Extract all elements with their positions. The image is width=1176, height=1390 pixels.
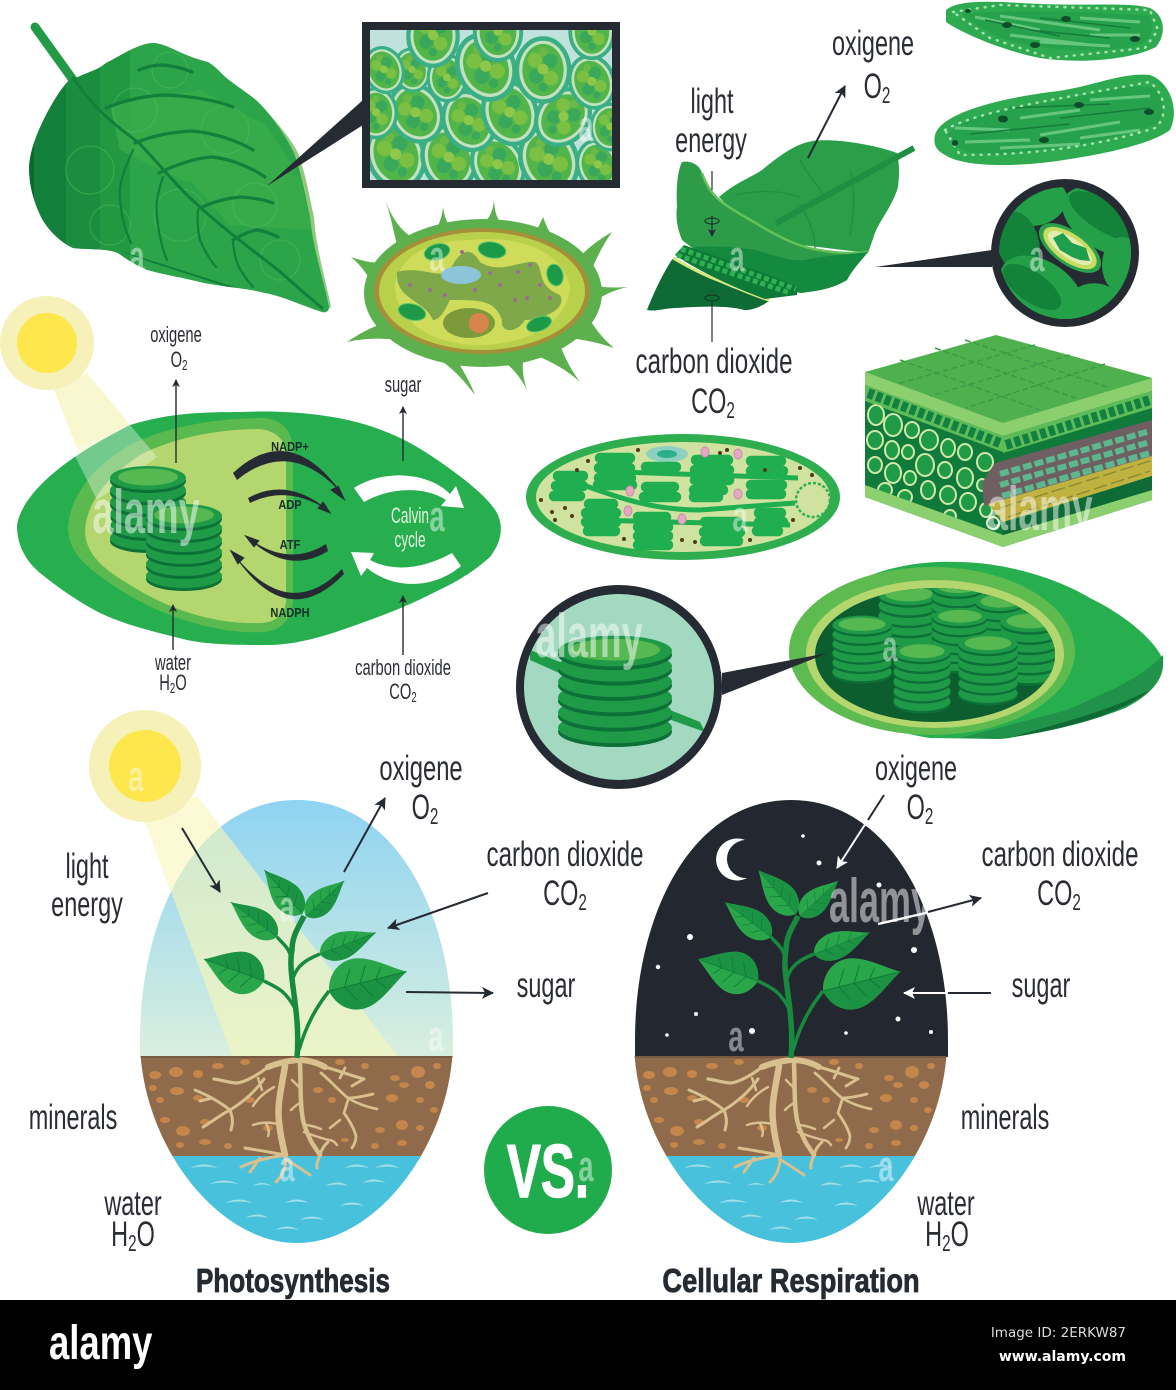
label: diagram carbon dioxide CO2 bbox=[355, 655, 451, 706]
soil, roots and water bbox=[624, 1056, 954, 1246]
footer logo: alamy bbox=[49, 1316, 153, 1370]
arrow: ATF bbox=[247, 537, 328, 561]
watermark: alamy marks: a bbox=[279, 881, 295, 931]
moon bbox=[716, 838, 747, 880]
watermark: alamy marks: a bbox=[129, 231, 145, 281]
watermark: alamy marks: a bbox=[732, 491, 748, 541]
thylakoid stack back bbox=[110, 466, 186, 553]
plant bbox=[197, 861, 413, 1058]
label: diagram water H2O bbox=[154, 650, 191, 697]
label: diagram water H2O: water bbox=[154, 650, 191, 675]
footer url: www.alamy.com bbox=[999, 1349, 1126, 1365]
label: day water H2O: 2 bbox=[128, 1231, 137, 1257]
thylakoid stack front bbox=[146, 504, 222, 591]
label: NADPH: NADPH bbox=[270, 605, 310, 620]
label: day water H2O: water bbox=[104, 1184, 162, 1223]
label: diagram oxigene O2 bbox=[150, 322, 202, 374]
label: night water H2O: H bbox=[925, 1215, 942, 1254]
label: Calvin cycle: cycle bbox=[394, 527, 426, 552]
arrow: oxygen out of leaf bbox=[808, 86, 845, 158]
watermark: alamy marks: a bbox=[728, 1011, 744, 1061]
label: light energy top: energy bbox=[675, 121, 747, 160]
label: day oxigene O2: oxigene bbox=[379, 750, 463, 788]
arrow: diagram sugar bbox=[402, 407, 404, 461]
arrow: ADP bbox=[248, 490, 329, 511]
arrow: day light energy bbox=[182, 828, 220, 892]
panel: photosynthesis day scene bbox=[130, 796, 460, 1246]
stars bbox=[656, 834, 933, 1037]
illustration: magnified cells circle bbox=[875, 179, 1139, 327]
label: day light energy: light bbox=[65, 847, 109, 886]
label: day water H2O bbox=[104, 1184, 162, 1257]
label: diagram water H2O: H bbox=[159, 670, 170, 695]
arrow: night oxygen bbox=[837, 795, 884, 868]
light beam overlay bbox=[72, 425, 157, 500]
label: night oxigene O2: O bbox=[907, 788, 925, 827]
soil, roots and water bbox=[130, 1056, 460, 1246]
label: day water H2O: O bbox=[137, 1215, 155, 1254]
label: day carbon dioxide CO2: CO bbox=[543, 874, 578, 913]
diagram: chloroplast light reactions and Calvin cycle bbox=[17, 412, 501, 645]
outer membrane band bbox=[68, 418, 293, 632]
label: diagram water H2O: 2 bbox=[170, 680, 175, 697]
label: oxigene O2 top: oxigene bbox=[832, 24, 914, 63]
watermark: alamy marks: a bbox=[882, 621, 898, 671]
label: night oxigene O2: 2 bbox=[925, 804, 933, 830]
label: day sugar: sugar bbox=[517, 966, 575, 1005]
illustration: micrograph with callout bbox=[267, 22, 620, 188]
label: night water H2O: water bbox=[917, 1184, 975, 1223]
label: day light energy bbox=[51, 847, 123, 924]
label: day oxigene O2 bbox=[379, 750, 463, 830]
arrow: diagram carbon dioxide bbox=[402, 596, 404, 655]
label: ADP: ADP bbox=[278, 497, 302, 512]
label: diagram oxigene O2: oxigene bbox=[150, 322, 202, 347]
footer image id: Image ID: 2ERKW87 bbox=[991, 1325, 1126, 1341]
label: night carbon dioxide CO2 bbox=[982, 836, 1138, 916]
label: diagram oxigene O2: 2 bbox=[182, 357, 188, 374]
footer bar bbox=[0, 1300, 1176, 1390]
label: night carbon dioxide CO2: CO bbox=[1037, 874, 1072, 913]
arrow: NADPH bbox=[232, 552, 344, 599]
label: oxigene O2 top: 2 bbox=[882, 83, 890, 109]
label: light energy top bbox=[675, 82, 747, 160]
arrow: diagram water bbox=[172, 605, 174, 650]
label: diagram oxigene O2: O bbox=[171, 347, 182, 372]
label: day oxigene O2: O bbox=[412, 788, 430, 827]
illustration: 3D chloroplast bbox=[789, 562, 1163, 739]
watermark: alamy marks: a bbox=[578, 1141, 594, 1191]
watermark: alamy marks: a bbox=[729, 231, 745, 281]
label: day carbon dioxide CO2 bbox=[487, 836, 643, 916]
watermark: alamy marks: alamy bbox=[829, 866, 931, 935]
label: day minerals: minerals bbox=[29, 1098, 117, 1137]
label: Calvin cycle: Calvin bbox=[391, 503, 429, 528]
illustration: leaf tissue block bbox=[865, 335, 1152, 547]
watermark: alamy marks: a bbox=[429, 231, 445, 281]
label: night carbon dioxide CO2: carbon dioxide bbox=[982, 836, 1138, 874]
night sky bbox=[635, 800, 948, 1057]
label: night water H2O: O bbox=[951, 1215, 969, 1254]
label: carbon dioxide CO2 top: CO bbox=[691, 382, 726, 421]
heading: Photosynthesis: Photosynthesis bbox=[196, 1263, 390, 1300]
watermark: alamy marks: a bbox=[428, 1011, 444, 1061]
illustration: chloroplast top bbox=[946, 2, 1163, 61]
arrowheads for cycle bbox=[232, 487, 343, 563]
label: day oxigene O2: 2 bbox=[430, 804, 438, 830]
arrow: Calvin cycle lower bbox=[351, 552, 461, 584]
illustration: granum magnifier circle bbox=[516, 585, 828, 789]
watermark: alamy marks bbox=[92, 101, 1093, 1191]
watermark: alamy marks: alamy bbox=[987, 474, 1093, 543]
arrow: light energy into leaf bbox=[711, 171, 713, 236]
sky bbox=[140, 800, 453, 1057]
arrow: day sugar bbox=[406, 992, 493, 993]
illustration: main green leaf bbox=[20, 27, 340, 320]
callout: VS badge: VS. bbox=[507, 1129, 589, 1213]
plant bbox=[691, 861, 907, 1058]
arrow: day oxygen bbox=[344, 798, 385, 872]
label: night carbon dioxide CO2: 2 bbox=[1072, 890, 1081, 916]
label: carbon dioxide CO2 top bbox=[636, 343, 792, 424]
watermark: alamy marks: alamy bbox=[535, 601, 643, 670]
illustration: chloroplast section bbox=[526, 434, 840, 560]
label: carbon dioxide CO2 top: carbon dioxide bbox=[636, 343, 792, 381]
label: day carbon dioxide CO2: 2 bbox=[578, 890, 587, 916]
label: ATF: ATF bbox=[280, 537, 300, 552]
label: diagram sugar: sugar bbox=[385, 372, 421, 397]
illustration: chloroplast second bbox=[934, 75, 1174, 165]
watermark: alamy marks: a bbox=[578, 101, 594, 151]
arrow: diagram oxygen bbox=[175, 380, 177, 463]
watermark: alamy marks: a bbox=[429, 491, 445, 541]
label: night oxigene O2: oxigene bbox=[875, 749, 957, 788]
label: oxigene O2 top bbox=[832, 24, 914, 109]
label: NADP+: NADP+ bbox=[271, 439, 309, 454]
stroma light area bbox=[85, 429, 286, 623]
label: night water H2O bbox=[917, 1184, 975, 1257]
label: oxigene O2 top: O bbox=[864, 67, 882, 106]
label: night oxigene O2 bbox=[875, 749, 957, 830]
label: day carbon dioxide CO2: carbon dioxide bbox=[487, 836, 643, 874]
arrow: carbon dioxide line bbox=[711, 302, 713, 342]
label: light energy top: light bbox=[690, 82, 734, 121]
watermark: alamy marks: a bbox=[279, 1141, 295, 1191]
chloroplast body bbox=[17, 412, 501, 645]
arrow: NADP+ bbox=[233, 451, 343, 495]
watermark: alamy marks: a bbox=[878, 1141, 894, 1191]
panel: cellular respiration night scene bbox=[624, 800, 954, 1246]
watermark: alamy marks: a bbox=[128, 751, 144, 801]
illustration: sun for chloroplast diagram bbox=[0, 296, 157, 500]
label: carbon dioxide CO2 top: 2 bbox=[726, 398, 735, 424]
light beam bbox=[145, 796, 398, 1056]
label: day light energy: energy bbox=[51, 885, 123, 924]
arrow: night sugar bbox=[904, 992, 991, 994]
label: night water H2O: 2 bbox=[942, 1231, 951, 1257]
illustration: plant cell bbox=[347, 200, 628, 395]
watermark: alamy marks: alamy bbox=[92, 477, 200, 546]
arrow: Calvin cycle upper bbox=[354, 475, 464, 508]
watermark: alamy marks: a bbox=[1029, 231, 1045, 281]
label: diagram carbon dioxide CO2: carbon dioxide bbox=[355, 655, 451, 680]
arrow: night carbon dioxide bbox=[878, 898, 981, 924]
label: night sugar: sugar bbox=[1012, 966, 1070, 1005]
label: Calvin cycle bbox=[391, 503, 429, 552]
illustration: leaf cross-section bbox=[647, 140, 914, 311]
illustration: sun bbox=[89, 710, 201, 822]
label: night minerals: minerals bbox=[961, 1098, 1049, 1137]
label: diagram carbon dioxide CO2: 2 bbox=[411, 689, 417, 706]
label: diagram water H2O: O bbox=[175, 670, 187, 695]
arrow: day carbon dioxide bbox=[388, 893, 488, 928]
label: diagram carbon dioxide CO2: CO bbox=[389, 679, 411, 704]
callout: VS badge bbox=[484, 1106, 612, 1234]
label: day water H2O: H bbox=[111, 1215, 128, 1254]
heading: Cellular Respiration: Cellular Respiration bbox=[662, 1264, 920, 1300]
